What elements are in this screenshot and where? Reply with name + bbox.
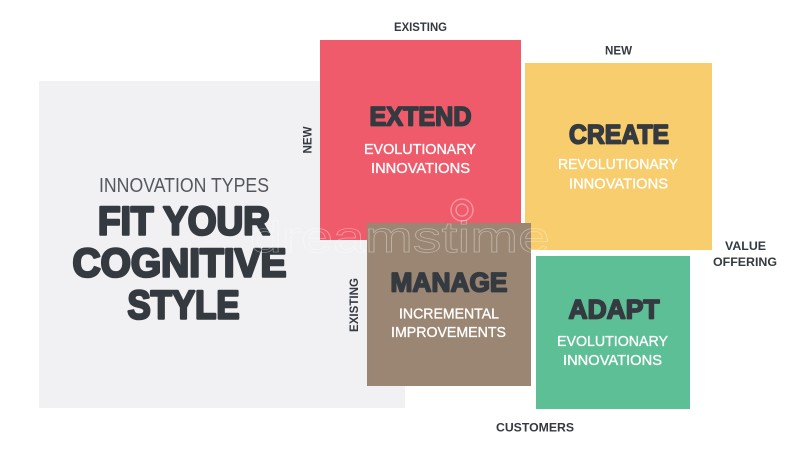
text: revolutionary innovations: INNOVATIONS [569,176,668,192]
text: evolutionary innovations: EVOLUTIONARY [557,333,668,350]
axis label: new top: NEW [605,44,633,58]
axis label: value offering: OFFERING [713,255,777,269]
heading: create: CREATE [569,120,669,150]
axis label: customers: CUSTOMERS [496,420,574,434]
panel: title background [39,81,405,408]
panel: adapt [536,256,690,409]
text: incremental improvements: IMPROVEMENTS [391,324,506,341]
axis label: existing left: EXISTING [347,278,361,332]
axis label: existing top: EXISTING [394,20,447,34]
title line 1: FIT YOUR [98,200,270,244]
text: evolutionary innovations: EVOLUTIONARY [364,141,476,158]
axis label: value offering: VALUE [725,239,766,253]
axis label: value offering [713,239,777,269]
panel: extend [320,40,521,240]
title line 2: COGNITIVE [72,242,286,286]
title block [72,175,286,328]
text: revolutionary innovations: REVOLUTIONARY [558,156,678,173]
heading: manage: MANAGE [390,268,508,298]
text: evolutionary innovations [557,333,668,369]
subtitle: INNOVATION TYPES [99,175,269,197]
title line 3: STYLE [128,284,240,328]
watermark [250,199,550,262]
text: evolutionary innovations [364,141,476,177]
heading: adapt: ADAPT [568,294,660,324]
text: incremental improvements [391,306,506,341]
text: revolutionary innovations [558,156,678,192]
heading: extend: EXTEND [370,102,472,132]
axis label: new left: NEW [300,126,314,154]
panel: manage [367,223,531,386]
text: evolutionary innovations: INNOVATIONS [371,160,470,177]
watermark: dreamstime [250,213,550,262]
text: evolutionary innovations: INNOVATIONS [563,352,662,369]
text: incremental improvements: INCREMENTAL [399,306,499,322]
panel: create [525,63,712,250]
